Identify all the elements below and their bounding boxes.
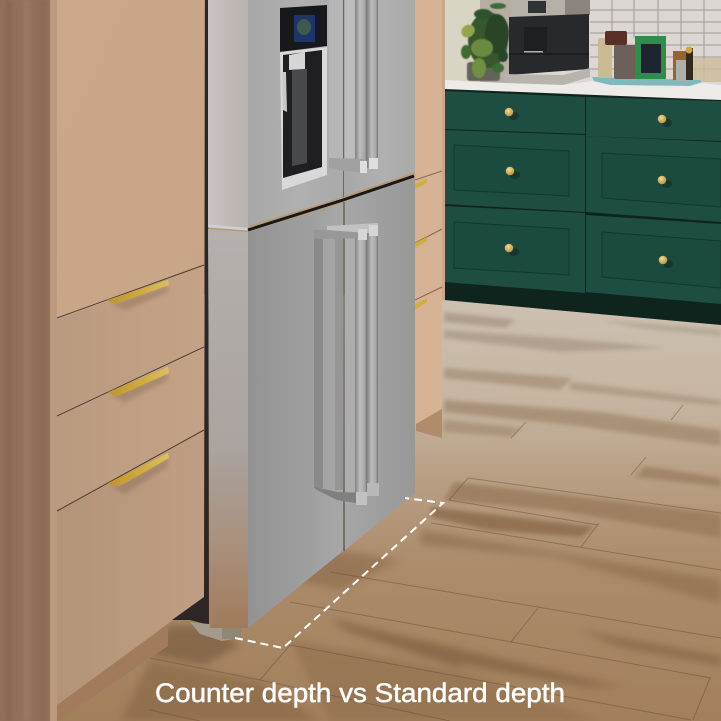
lower handles	[313, 223, 379, 505]
fridge foot	[190, 622, 241, 641]
fridge upper section	[208, 0, 415, 227]
lower door	[57, 431, 204, 705]
water dispenser recess	[280, 47, 327, 190]
chrome and dark seam between fridge sections	[208, 176, 414, 230]
dashed outline: standard depth footprint	[235, 498, 443, 648]
back wood cabinet column	[415, 0, 445, 438]
plant	[459, 3, 509, 81]
handle shadows	[112, 286, 168, 494]
back wall with tiles	[443, 0, 721, 90]
fridge lower section	[208, 178, 415, 628]
shadow beneath cabinet and fridge	[150, 625, 240, 665]
drawer 1	[57, 266, 204, 415]
left wood cabinet	[0, 0, 204, 721]
coffee items on tray	[592, 31, 702, 86]
caption: Counter depth vs Standard depth	[155, 678, 565, 708]
drawer 2	[57, 348, 204, 510]
lower left door	[248, 203, 343, 628]
left bottom drawer	[444, 206, 585, 293]
wood floor	[0, 295, 721, 721]
display panel	[280, 5, 327, 52]
lower side panel	[208, 229, 248, 628]
left middle drawer	[444, 130, 585, 212]
lower right door	[345, 178, 415, 550]
right middle drawer	[586, 136, 721, 222]
top door	[57, 0, 204, 318]
upper handles	[329, 0, 378, 173]
toe kick	[57, 625, 168, 721]
right bottom drawer	[586, 215, 721, 304]
fridge dark side gap	[172, 0, 209, 625]
coffee machine	[503, 0, 590, 85]
right top drawer	[586, 97, 721, 141]
green base cabinets	[444, 89, 721, 325]
knobs	[505, 108, 667, 264]
left top drawer	[444, 91, 585, 134]
gold handles	[107, 280, 169, 486]
countertop	[444, 80, 721, 100]
